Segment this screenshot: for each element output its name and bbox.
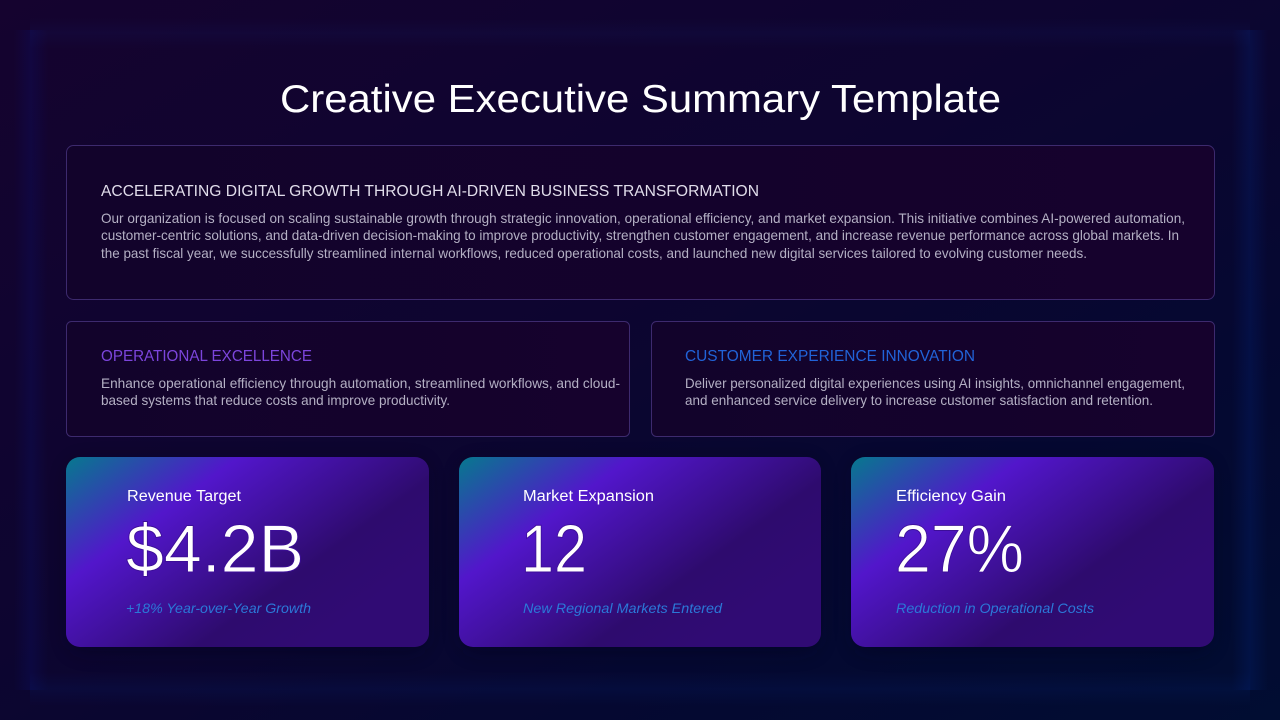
market label: Market Expansion [523,488,654,505]
operational excellence body: Enhance operational efficiency through automation, streamlined workflows, and cloud- [101,376,620,391]
card: revenue target [66,457,429,651]
revenue label: Revenue Target [127,488,242,505]
panel: customer experience innovation [652,322,1214,436]
market note: New Regional Markets Entered [523,600,723,616]
operational excellence heading: OPERATIONAL EXCELLENCE [101,348,312,365]
card: market expansion [459,457,821,651]
efficiency value: 27% [895,511,1024,587]
market value: 12 [521,511,587,587]
summary body [101,211,1185,261]
summary heading: ACCELERATING DIGITAL GROWTH THROUGH AI-DRIVEN BUSINESS TRANSFORMATION [101,183,759,200]
efficiency label: Efficiency Gain [896,488,1006,505]
customer experience heading: CUSTOMER EXPERIENCE INNOVATION [685,348,975,365]
summary body: the past fiscal year, we successfully streamlined internal workflows, reduced operational costs, and launched new digital services tailored to evolving customer needs. [101,246,1087,261]
operational excellence body [101,376,620,408]
customer experience body: Deliver personalized digital experiences using AI insights, omnichannel engagement, [685,376,1185,391]
title: Creative Executive Summary Template [280,78,1001,121]
summary body: customer-centric solutions, and data-driven decision-making to improve productivity, strengthen customer engagement, and increase revenue performance across global markets. In [101,228,1179,243]
panel: operational excellence [66,322,630,436]
revenue note: +18% Year-over-Year Growth [126,600,311,616]
efficiency note: Reduction in Operational Costs [896,600,1094,616]
revenue value: $4.2B [126,511,304,587]
customer experience body [685,376,1185,408]
customer experience body: and enhanced service delivery to increase customer satisfaction and retention. [685,393,1153,408]
card: efficiency gain [851,457,1214,651]
operational excellence body: based systems that reduce costs and improve productivity. [101,393,450,408]
panel: summary [66,146,1214,300]
summary body: Our organization is focused on scaling sustainable growth through strategic innovation, operational efficiency, and market expansion. This initiative combines AI-powered automation, [101,211,1185,226]
